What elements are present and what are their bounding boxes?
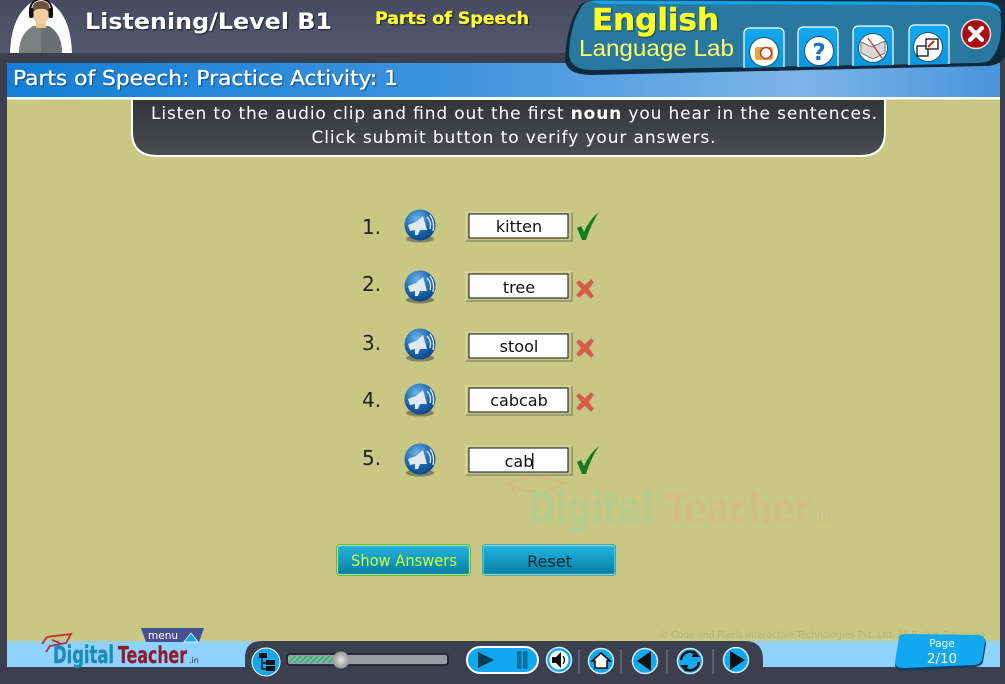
question row 2: 2. [362,272,381,296]
question row 1: 1. [362,215,381,239]
menu tab [141,628,204,642]
logo: Digital Teacher: Digital [53,641,114,669]
question row 4: cabcab [490,391,548,410]
icon: close button [962,20,990,48]
watermark: Digital Teacher: Digital [528,483,653,534]
logo text: Language Lab: Language Lab [579,35,734,61]
page counter: 2/10 [927,651,957,667]
button: Reset [482,544,616,576]
heading: topic: Parts of Speech [375,9,529,28]
practice area [7,98,1000,643]
question row 1: kitten [496,217,542,236]
control separators [579,649,713,674]
button: Show Answers: Show Answers [351,551,457,570]
question row 1 [362,210,599,242]
page counter: Page [929,638,955,650]
logo text: English: English [592,3,719,38]
icon tab: help [798,27,838,67]
header bar [0,0,1005,53]
question row 4 [362,384,594,416]
watermark: Digital Teacher: Teacher [666,484,811,533]
activity title: Parts of Speech: Practice Activity: 1 [13,66,398,90]
question row 5: 5. [362,446,381,470]
footer strip [7,641,1000,667]
question row 3: 3. [362,331,381,355]
icon tab: timer folder [744,28,784,68]
menu tab: menu [148,630,178,642]
icon: previous [632,648,658,674]
question row 2 [362,270,594,304]
logo: Digital Teacher [42,634,199,669]
logo: Digital Teacher: .in [189,656,199,665]
question row 5: cab [505,452,533,471]
icon: listener avatar with headphones [10,0,72,53]
logo: Digital Teacher: Teacher [118,643,187,669]
icon: home [588,648,614,674]
question row 2: tree [503,278,535,297]
icon tab: help: ? [812,40,826,66]
watermark: Digital Teacher: .in [813,509,831,527]
icon: next [724,648,748,672]
panel: English Language Lab [565,0,1005,75]
button: Reset: Reset [527,552,572,571]
title bar [7,63,1000,100]
heading: level: Listening/Level B1 [85,10,332,35]
question row 4: 4. [362,388,381,412]
icon tab: resize windows [909,25,949,65]
copyright notice: © Code and Pixels Interactive Technologies Pvt. Ltd. All Rights Reserved [659,630,985,641]
page counter [895,634,986,671]
question row 3: stool [500,337,538,356]
question row 3 [362,328,594,362]
button: Show Answers [336,544,470,576]
instruction line 1: Listen to the audio clip and find out the first noun you hear in the sentences. [151,104,877,124]
panel: instructions [132,99,885,156]
watermark: Digital Teacher [505,476,831,534]
icon: replay [678,648,702,674]
icon: volume [546,648,572,672]
question row 5 [362,444,599,476]
progress slider [287,652,448,668]
media control bar [245,641,763,684]
instruction line 2: Click submit button to verify your answers. [312,128,716,148]
icon tab: open book [853,26,893,66]
play and pause control [467,647,538,673]
icon: sitemap button [252,648,280,676]
